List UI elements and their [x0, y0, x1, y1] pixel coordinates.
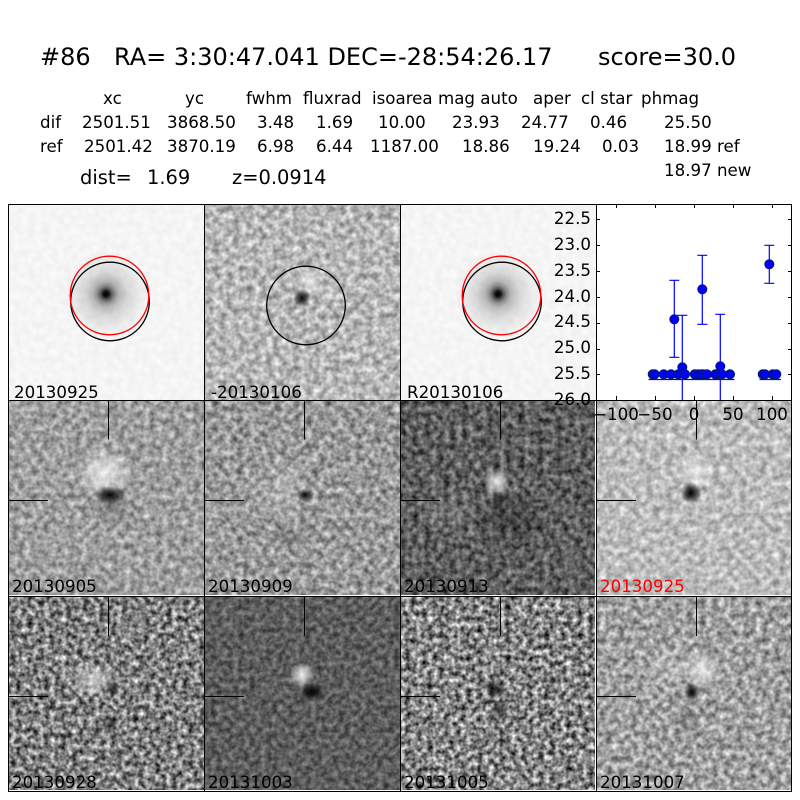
distance and redshift: dist=	[80, 166, 132, 189]
red aperture circle	[462, 256, 541, 335]
date label: 20130905	[12, 577, 97, 596]
panel: 20130905	[8, 400, 204, 596]
date label: 20130909	[208, 577, 293, 596]
table of measurements: yc	[185, 89, 204, 108]
date label: 20130925	[14, 383, 99, 402]
y axis labels: 23.0	[554, 235, 591, 254]
y axis labels: 23.5	[554, 261, 591, 280]
y axis labels: 24.5	[554, 312, 591, 331]
residual blobs	[66, 662, 122, 733]
y axis labels	[554, 209, 591, 409]
table of measurements: 18.97 new	[664, 161, 751, 180]
residual blobs	[289, 662, 325, 702]
table of measurements: isoarea	[372, 89, 433, 108]
crosshair	[400, 400, 500, 500]
residual blobs	[76, 447, 134, 526]
crosshair	[596, 596, 696, 696]
date label: R20130106	[407, 383, 503, 402]
y axis labels: 22.5	[554, 209, 591, 228]
date label: 20131005	[404, 773, 489, 792]
distance and redshift	[80, 166, 327, 189]
table of measurements: 18.86	[462, 137, 510, 156]
y axis labels: 25.5	[554, 364, 591, 383]
date label: 20130925	[600, 577, 685, 596]
table of measurements: cl star	[581, 89, 632, 108]
crosshair	[8, 400, 108, 500]
panel: reference galaxy 20130925	[8, 204, 204, 402]
table of measurements: fluxrad	[303, 89, 362, 108]
panel: difference -20130106	[204, 204, 400, 402]
x axis labels: 100	[756, 405, 788, 424]
table of measurements: 6.98	[257, 137, 294, 156]
table of measurements: dif	[40, 113, 62, 132]
panel: 20130925 highlighted	[596, 400, 792, 596]
distance and redshift: z=0.0914	[232, 166, 327, 189]
panel: 20131007	[596, 596, 792, 792]
distance and redshift: 1.69	[147, 166, 190, 189]
table of measurements: 3.48	[257, 113, 294, 132]
error bars	[648, 245, 781, 400]
residual blobs	[484, 678, 511, 723]
table of measurements: 2501.42	[84, 137, 153, 156]
panel: 20130909	[204, 400, 400, 596]
table of measurements: 23.93	[452, 113, 500, 132]
table of measurements	[40, 89, 751, 180]
table of measurements: 25.50	[664, 113, 712, 132]
table of measurements: fwhm	[246, 89, 292, 108]
y axis labels: 24.0	[554, 287, 591, 306]
title: #86	[40, 43, 91, 71]
title: RA= 3:30:47.041 DEC=-28:54:26.17	[114, 43, 553, 71]
panel: 20131005	[400, 596, 595, 792]
black aperture circle	[71, 262, 149, 341]
panel: 20130913	[400, 400, 595, 596]
panel: 20131003	[204, 596, 400, 792]
y axis labels: 25.0	[554, 338, 591, 357]
residual blobs	[251, 452, 319, 551]
table of measurements: 6.44	[316, 137, 353, 156]
crosshair	[204, 400, 304, 500]
galaxy core	[454, 250, 542, 338]
panel: 20130928	[8, 596, 204, 792]
table of measurements: 10.00	[378, 113, 426, 132]
table of measurements: 1187.00	[370, 137, 439, 156]
crosshair	[596, 400, 696, 500]
x axis labels: 0	[689, 405, 699, 424]
panel frames	[8, 204, 792, 792]
table of measurements: 18.99 ref	[664, 137, 741, 156]
residual blobs	[414, 468, 548, 552]
table of measurements: 3868.50	[167, 113, 236, 132]
table of measurements: 24.77	[521, 113, 569, 132]
y axis labels: 26.0	[554, 390, 591, 409]
x axis labels: −50	[637, 405, 673, 424]
x axis labels: −100	[593, 405, 639, 424]
table of measurements: ref	[40, 137, 64, 156]
title: score=30.0	[598, 43, 736, 71]
table of measurements: 0.03	[602, 137, 639, 156]
table of measurements: phmag	[641, 89, 699, 108]
table of measurements: 19.24	[533, 137, 581, 156]
table of measurements: 3870.19	[167, 137, 236, 156]
date label: 20130928	[12, 773, 97, 792]
table of measurements: mag auto	[438, 89, 518, 108]
date label: 20130913	[404, 577, 489, 596]
red aperture circle	[70, 256, 149, 335]
galaxy core	[62, 250, 150, 338]
x axis labels	[593, 405, 788, 424]
date label: 20131007	[600, 773, 685, 792]
x axis labels: 50	[722, 405, 744, 424]
axis ticks	[596, 204, 792, 400]
residual blobs	[679, 454, 715, 504]
title	[40, 43, 736, 71]
table of measurements: 0.46	[590, 113, 627, 132]
date label: -20130106	[211, 383, 302, 402]
date label: 20131003	[208, 773, 293, 792]
crosshair	[204, 596, 304, 696]
data points	[648, 260, 781, 379]
residual blobs	[293, 267, 323, 307]
residual blobs	[636, 644, 722, 744]
table of measurements: 2501.51	[82, 113, 151, 132]
table of measurements: aper	[533, 89, 571, 108]
table of measurements: 1.69	[316, 113, 353, 132]
aperture circle	[267, 266, 345, 345]
crosshair	[400, 596, 500, 696]
table of measurements: xc	[103, 89, 122, 108]
black aperture circle	[463, 262, 541, 341]
chart: light curve	[554, 204, 792, 424]
crosshair	[8, 596, 108, 696]
panel: reference R20130106	[400, 204, 596, 402]
